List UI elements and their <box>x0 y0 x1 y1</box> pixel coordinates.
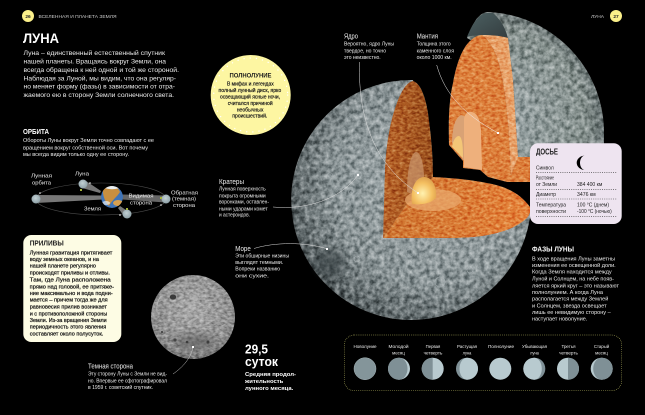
moon phases text: ляется яркий круг – это называют <box>532 282 619 289</box>
leader: seas <box>254 244 328 250</box>
phase: waning gibbous <box>523 358 545 380</box>
left page header <box>22 10 117 22</box>
phase labels: Убывающая <box>522 344 547 349</box>
leader: mantle <box>437 65 499 134</box>
phase: waxing gibbous <box>456 358 478 380</box>
core <box>412 177 436 204</box>
leader: craters <box>273 174 359 208</box>
dossier rows: 100 °C (днем) <box>577 202 609 208</box>
label: core: Вероятно, ядро Луны <box>344 42 394 48</box>
orbit labels: Видимая <box>128 194 154 200</box>
upper inner shell <box>467 13 508 39</box>
phase labels: луна <box>463 350 472 356</box>
far side label: в 1959 г. советский спутник. <box>88 384 153 391</box>
label: core <box>344 34 394 61</box>
phase labels: месяц <box>595 350 608 356</box>
leader: core <box>359 62 419 194</box>
panel: orbit <box>23 129 198 218</box>
orbit diagram <box>31 171 198 218</box>
full moon text: освещающий ясные ночи, <box>220 93 280 100</box>
vertical cut face <box>383 81 433 238</box>
full moon text: полный лунный диск, ярко <box>218 87 281 94</box>
dossier rows: поверхности <box>536 209 566 215</box>
label: core: Ядро <box>344 34 358 40</box>
phase labels: Старый <box>594 343 610 349</box>
panel: moon phases <box>344 335 622 391</box>
mantle block <box>449 35 531 182</box>
phase labels: луна <box>530 350 539 356</box>
far side label: но. Впервые ее сфотографировал <box>88 378 167 384</box>
far side leader line <box>173 346 194 374</box>
orbit labels: орбита <box>32 181 52 187</box>
tides text: нашей планете регулярно <box>30 263 96 270</box>
label: core: это неизвестно. <box>344 55 381 61</box>
icon: crescent <box>577 156 585 170</box>
label: seas: Море <box>235 246 251 253</box>
label: craters <box>219 179 269 219</box>
dossier rows: 3476 км <box>577 192 596 198</box>
full moon text: происшествий. <box>232 113 267 120</box>
phase labels: четверть <box>559 350 578 356</box>
mare shadow <box>315 249 345 277</box>
intro text: но меняет форму (фазы) в зависимости от отра- <box>24 84 175 91</box>
orbit heading: ОРБИТА <box>23 129 49 136</box>
far side label: Эту сторону Луны с Земли не вид- <box>88 371 167 377</box>
mantle halo <box>405 189 461 211</box>
label: craters: покрыта огромными <box>219 193 266 199</box>
intro text: нашей планеты. Вращаясь вокруг Земли, она <box>24 58 166 66</box>
title: ЛУНА <box>23 30 59 46</box>
callout: full moon <box>211 55 291 135</box>
stat: 29.5 days: жительность <box>244 379 284 385</box>
moon phases text <box>532 256 619 323</box>
right page header: ЛУНА <box>591 14 605 20</box>
stat: 29.5 days: суток <box>245 354 278 369</box>
label: craters: Кратеры <box>219 179 244 186</box>
label: craters: ными ударами комет <box>219 206 268 212</box>
phase labels: Молодой <box>388 343 409 349</box>
tides text: равновесия прилив возникает <box>30 305 107 311</box>
tides text: Земли. Из-за вращения Земли <box>30 318 107 324</box>
intro text: Наблюдая за Луной, мы видим, что она регуляр- <box>24 74 176 82</box>
upper crust <box>467 12 604 160</box>
label: craters: и астероидов. <box>219 213 250 219</box>
stat: 29.5 days: Средняя продол- <box>245 372 296 378</box>
phase labels: Растущая <box>457 344 477 349</box>
moon phases text: полнолунием. А когда Луна <box>532 290 604 296</box>
panel: dossier <box>530 143 622 224</box>
intro text: жаемого ею в сторону Земли солнечного света. <box>24 92 174 99</box>
phase labels: Третья <box>562 344 576 349</box>
moon phases text: наступает новолуние. <box>532 317 588 323</box>
orbit labels: (темная) <box>172 197 196 203</box>
icon: earth <box>101 185 123 208</box>
label: seas: Эти обширные низины <box>235 253 289 259</box>
full moon text <box>218 81 281 120</box>
stat: 29.5 days <box>244 341 296 392</box>
orbit text: вращением вокруг собственной оси. Вот почему <box>23 144 148 152</box>
phase labels: Полнолуние <box>488 344 514 349</box>
label: core: твердое, но точно <box>344 48 386 54</box>
label: seas: выглядят темными. <box>235 260 283 266</box>
phase labels: месяц <box>392 350 405 356</box>
horizontal cut face <box>383 177 530 238</box>
phase: waxing crescent <box>388 358 410 380</box>
far side label <box>88 364 167 391</box>
moon phases text: В ходе вращения Луны заметны <box>532 256 615 262</box>
tides text: периодичность этого явления <box>30 325 106 331</box>
dossier rows: Расстояние <box>536 176 554 182</box>
label: mantle: каменного слоя <box>417 48 454 54</box>
label: seas <box>235 246 289 279</box>
left page header: ВСЕЛЕННАЯ И ПЛАНЕТА ЗЕМЛЯ <box>38 14 117 20</box>
moon phases text: лишь ее невидимую сторону – <box>532 310 612 316</box>
phase: waning crescent <box>591 358 613 380</box>
moon cutaway: lower piece <box>291 80 531 320</box>
dossier rows: -100 °C (ночью) <box>577 209 612 215</box>
tides heading: ПРИЛИВЫ <box>30 239 64 248</box>
label: craters: воронками, оставлен- <box>219 200 269 206</box>
orbit labels <box>31 171 198 213</box>
moon phases text: Когда Земля находится между <box>532 270 612 276</box>
right page header <box>591 10 622 22</box>
phase labels: Новолуние <box>354 344 377 349</box>
tides text: воду земных океанов, и на <box>30 257 100 263</box>
left page header: 26 <box>25 14 31 20</box>
label: craters: Лунная поверхность <box>219 187 266 193</box>
phase: first quarter <box>422 358 444 380</box>
dossier rows: Диаметр <box>536 192 556 198</box>
intro text <box>24 49 179 99</box>
dossier rows <box>536 165 612 215</box>
full moon text: необычных <box>237 107 264 113</box>
panel: tides <box>23 235 121 342</box>
tides text: и с противоположной стороны <box>30 310 107 317</box>
label: seas: они сухие. <box>235 273 269 279</box>
orbit labels: Лунная <box>31 173 52 179</box>
phase labels: Первая <box>426 344 441 349</box>
phase: last quarter <box>557 358 579 380</box>
dossier rows: 384 400 км <box>577 182 603 188</box>
moon phases text: и Солнцем, звезда освещает <box>532 303 607 309</box>
phase labels <box>354 343 610 356</box>
tides text: составляет около полусуток. <box>30 332 104 338</box>
tides text: мается – причем тогда же для <box>30 298 108 304</box>
label: seas: Вопреки названию <box>235 267 280 273</box>
phase labels: четверть <box>424 350 443 356</box>
tides text <box>30 250 114 338</box>
far side moon <box>151 275 235 359</box>
orbit labels: Земля <box>84 207 101 213</box>
orbit text: Обороты Луны вокруг Земли точно совпадают с ее <box>23 138 154 144</box>
orbit labels: сторона <box>173 203 196 209</box>
orbit labels: сторона <box>130 200 153 206</box>
label: mantle <box>417 34 454 61</box>
mantle rim <box>482 35 518 175</box>
dossier rows: от Земли <box>536 182 557 188</box>
orbit labels: Луна <box>75 171 90 177</box>
stat: 29.5 days: лунного месяца. <box>245 386 294 392</box>
dossier rows: Температура <box>536 202 566 208</box>
stat: 29.5 days: 29,5 <box>245 341 268 356</box>
full moon text: считался причиной <box>228 100 273 107</box>
inner layers <box>452 112 482 170</box>
label: mantle: около 1000 км. <box>417 55 452 61</box>
craters <box>328 172 473 287</box>
phase: full moon <box>489 358 511 380</box>
moon phases text: изменения ее освещенной доли. <box>532 262 616 269</box>
far side label: Темная сторона <box>88 364 133 371</box>
tides text: Там, где Луна расположена <box>30 277 112 283</box>
lower crust <box>291 80 531 320</box>
moon phases text: Луной и Солнцем, на небе появ- <box>532 276 614 283</box>
dossier heading: ДОСЬЕ <box>536 147 558 156</box>
tides text: прямо над головой, ее притяже- <box>30 283 114 290</box>
phase: new moon <box>354 358 376 380</box>
label: mantle: Мантия <box>417 34 438 40</box>
moon phases heading: ФАЗЫ ЛУНЫ <box>532 246 574 253</box>
moon cutaway: upper piece <box>449 12 604 182</box>
intro text: всегда обращена к ней одной и той же стороной. <box>24 66 179 74</box>
intro text: Луна – единственный естественный спутник <box>24 49 165 57</box>
tides text: ние максимально и вода подни- <box>30 291 113 297</box>
orbit text <box>23 138 154 158</box>
dossier rows: Символ <box>536 165 554 171</box>
full moon text: В мифах и легендах <box>227 81 274 87</box>
orbit text: мы всегда видим только одну ее сторону. <box>23 152 129 158</box>
tides text: Лунная гравитация притягивает <box>30 250 113 256</box>
moon phases text: располагается между Землей <box>532 296 608 303</box>
full moon heading: ПОЛНОЛУНИЕ <box>230 73 272 80</box>
orbit labels: Обратная <box>171 190 198 196</box>
label: mantle: Толщина этого <box>417 42 451 48</box>
right page header: 27 <box>613 14 619 20</box>
tides text: происходят приливы и отливы. <box>30 271 110 277</box>
